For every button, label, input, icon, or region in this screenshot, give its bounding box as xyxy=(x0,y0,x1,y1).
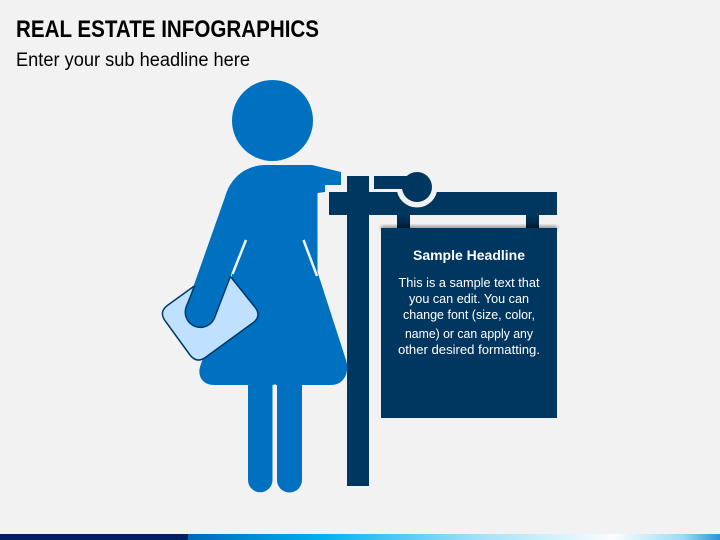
waist slits xyxy=(232,240,317,400)
crossbar xyxy=(329,192,557,215)
hangers xyxy=(397,215,539,228)
sign headline: Sample Headline xyxy=(413,247,525,263)
arm outline over folder xyxy=(185,276,230,327)
ring cut-out xyxy=(396,166,438,208)
sign body text: you can edit. You can xyxy=(409,292,529,306)
panel shadow xyxy=(381,226,557,230)
sign body text: change font (size, color, xyxy=(403,308,535,322)
sign body text: name) or can apply any xyxy=(405,327,534,341)
legs xyxy=(248,380,302,492)
title: REAL ESTATE INFOGRAPHICS xyxy=(16,16,319,43)
folder xyxy=(162,266,258,360)
icon: real estate sign xyxy=(329,166,557,486)
body and dress xyxy=(199,165,347,385)
subtitle: Enter your sub headline here xyxy=(16,50,250,71)
icon: woman figure xyxy=(162,80,347,492)
sign post xyxy=(347,176,369,486)
sign body text xyxy=(398,276,540,357)
sign body text: This is a sample text that xyxy=(398,276,540,290)
arm xyxy=(185,197,262,327)
handle xyxy=(374,172,432,202)
footer bar xyxy=(0,534,720,540)
sign panel xyxy=(381,228,557,418)
sign body text: other desired formatting. xyxy=(398,343,540,357)
head xyxy=(232,80,313,161)
